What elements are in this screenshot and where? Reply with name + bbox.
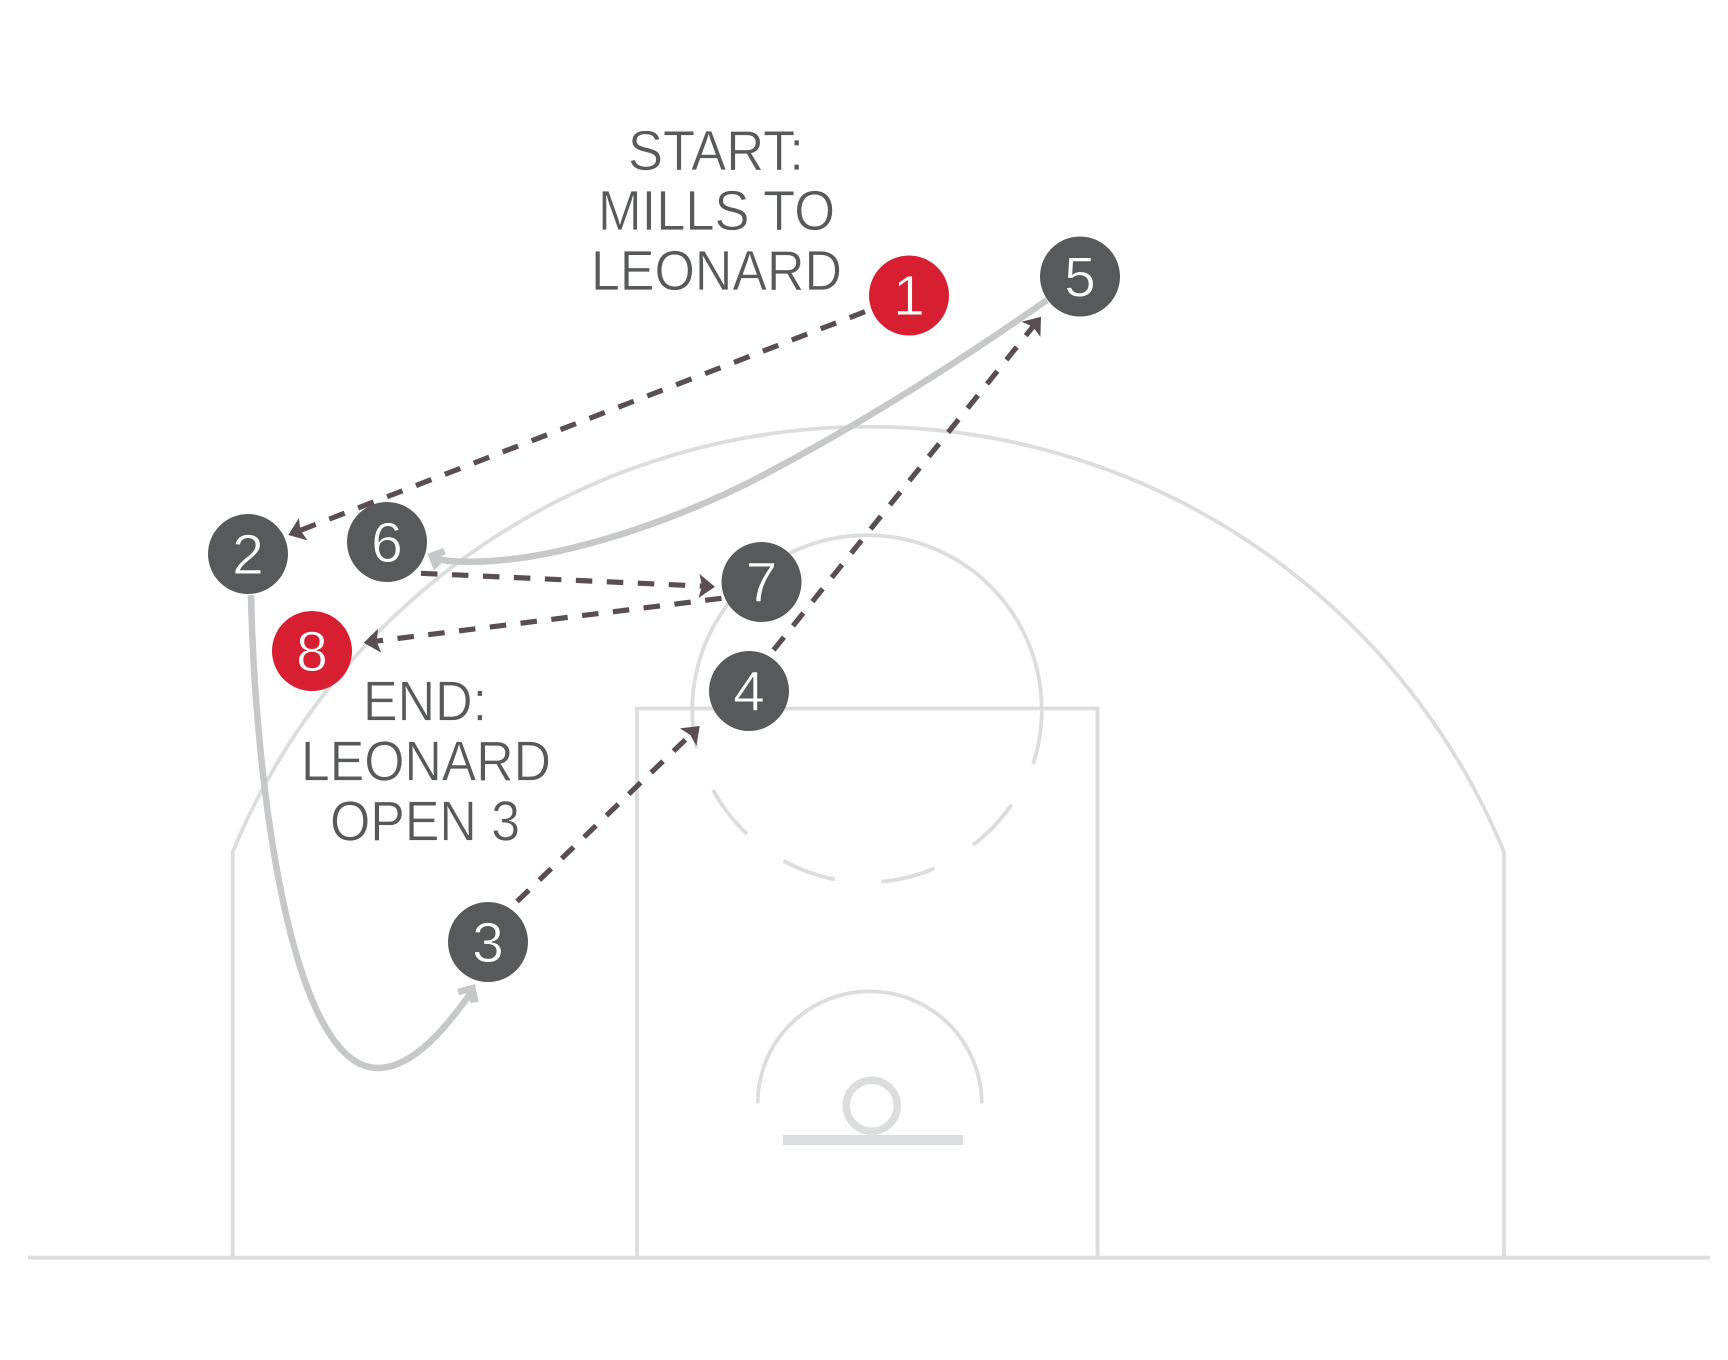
label: end: OPEN 3: [330, 790, 520, 854]
backboard: [783, 1135, 963, 1145]
step 2 marker: [208, 514, 288, 594]
label: start: START:: [628, 119, 804, 183]
step 5 marker: 5: [1064, 246, 1096, 310]
pass: 6 to 7: [421, 573, 715, 598]
free-throw lane: [637, 708, 1098, 1258]
hoop stem: [867, 1128, 878, 1136]
step 6 marker: [347, 502, 427, 582]
label: start: MILLS TO: [598, 179, 835, 243]
restricted area arc: [758, 991, 982, 1103]
pass: 7 to 8: [364, 598, 722, 653]
half-court markings: [28, 427, 1710, 1258]
step 1 marker: [869, 256, 949, 336]
player movement: 5 to 6: [428, 300, 1047, 570]
label: end: [301, 670, 551, 854]
label: start: LEONARD: [591, 239, 842, 303]
hoop: [846, 1080, 897, 1131]
step 4 marker: 4: [733, 660, 765, 724]
step 3 marker: 3: [472, 911, 504, 975]
free-throw circle, solid part: [692, 535, 1042, 764]
step 6 marker: 6: [371, 511, 403, 575]
pass: 3 to 4: [517, 726, 700, 902]
step 8 marker: [272, 611, 352, 691]
pass: 1 to 2: [288, 312, 865, 540]
step 2 marker: 2: [232, 523, 264, 587]
label: start: [591, 119, 842, 303]
step 3 marker: [448, 902, 528, 982]
step 8 marker: 8: [296, 620, 328, 684]
step 4 marker: [709, 651, 789, 731]
step 7 marker: [722, 542, 802, 622]
label: end: END:: [363, 670, 487, 734]
step 5 marker: [1040, 236, 1120, 316]
label: end: LEONARD: [301, 730, 551, 794]
step 1 marker: 1: [893, 264, 925, 328]
baseline: [28, 1256, 1710, 1260]
step 7 marker: 7: [746, 551, 777, 615]
pass: 4 to 5: [774, 317, 1041, 650]
free-throw circle, dashed part: [713, 790, 1012, 882]
three-point line: [233, 427, 1504, 1258]
player movement: 2 to 3: [251, 595, 478, 1068]
